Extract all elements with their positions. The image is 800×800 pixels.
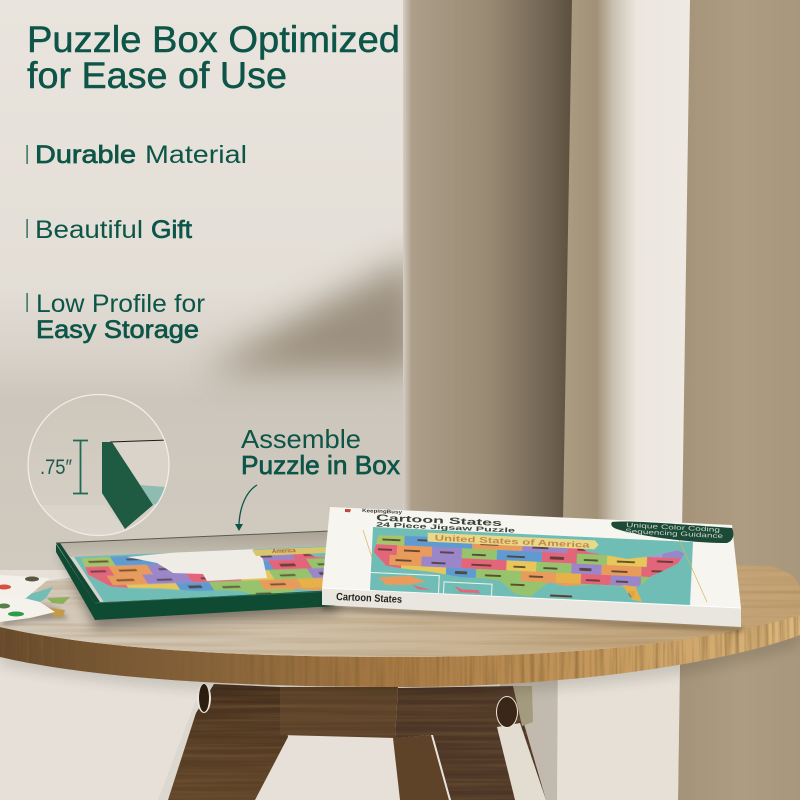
box floor [70, 546, 330, 602]
spine label: Cartoon States [336, 591, 402, 606]
callout pill: color coding: Unique Color Coding [626, 522, 721, 534]
round wooden table [0, 562, 800, 695]
callout pill: color coding [611, 522, 733, 543]
table legs [158, 683, 546, 800]
title: for Ease of Use [27, 55, 287, 96]
callout heading: assemble puzzle in box: Assemble [241, 424, 361, 454]
map title banner [427, 533, 599, 550]
title: Puzzle Box Optimized [27, 19, 400, 60]
map on lid [370, 527, 693, 606]
depth dimension bracket [73, 440, 88, 494]
box title: Cartoon States [376, 513, 502, 528]
open puzzle box with assembled map [56, 530, 343, 634]
box title: 24 Piece Jigsaw Puzzle [376, 522, 516, 535]
magnifier circle: box depth [28, 394, 170, 540]
feature: durable material: Durable [35, 141, 136, 169]
arrow to box [235, 485, 257, 531]
feature: beautiful gift: Gift [151, 216, 192, 244]
feature: low profile for easy storage: Low Profile for [36, 290, 205, 318]
box back wall [56, 531, 330, 558]
callout heading: assemble puzzle in box: Puzzle in Box [241, 450, 400, 480]
brand text: KeepingBusy [362, 508, 402, 516]
feature: low profile for easy storage: Easy Storage [36, 316, 199, 344]
feature: low profile for easy storage [26, 290, 205, 344]
puzzle box lid [322, 507, 745, 632]
partially assembled map: America [272, 548, 296, 555]
feature: durable material [26, 141, 247, 169]
feature: beautiful gift: Beautiful [35, 216, 143, 244]
feature: durable material: Material [145, 141, 247, 169]
partially assembled map [74, 546, 326, 602]
brand text [345, 508, 402, 516]
box front wall [56, 544, 335, 620]
box title [376, 513, 516, 535]
feature: beautiful gift [26, 216, 192, 244]
map title banner: United States of America [434, 533, 591, 550]
callout pill: color coding: Sequencing Guidance [625, 528, 724, 540]
depth label: .75″ [40, 456, 72, 479]
callout heading: assemble puzzle in box [241, 424, 400, 480]
lid top face [322, 507, 741, 608]
lid front face [322, 588, 741, 627]
title [27, 19, 400, 96]
gold guide lines [363, 530, 707, 602]
loose puzzle pieces [0, 575, 70, 625]
